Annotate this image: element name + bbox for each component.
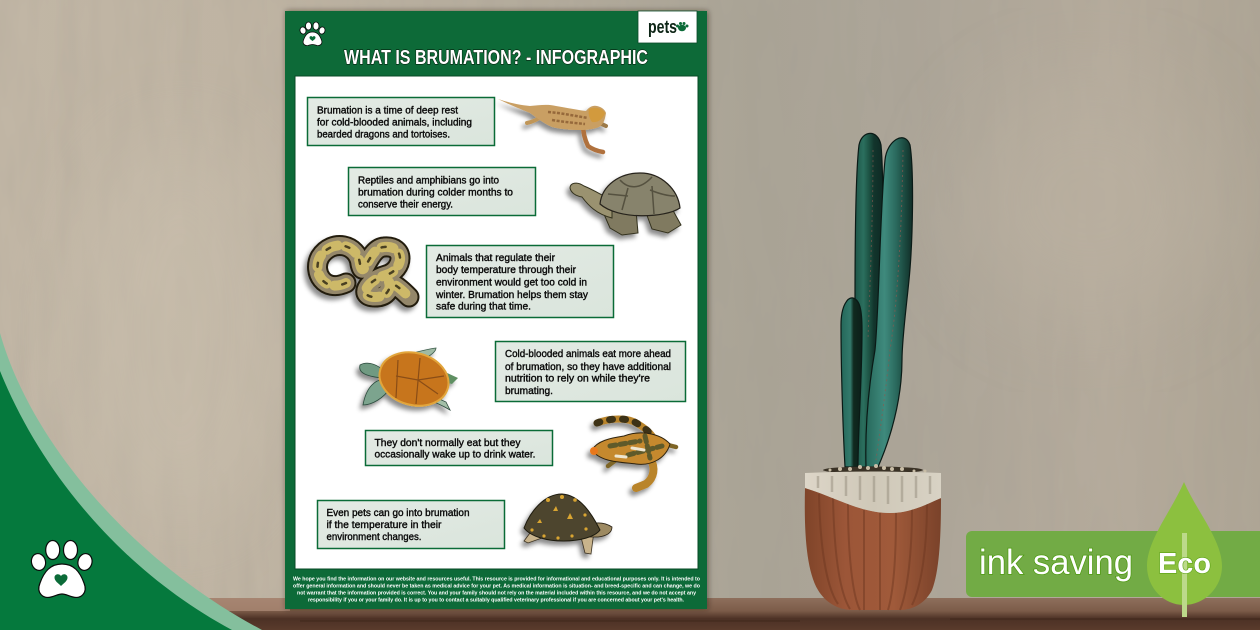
text box 5: occasionally wake up to drink water. bbox=[374, 448, 536, 460]
illustration: giant tortoise bbox=[570, 173, 681, 235]
badge: ink saving: ink saving bbox=[979, 543, 1133, 582]
text box 6: Even pets can go into brumation bbox=[326, 507, 470, 519]
text box 2 bbox=[348, 168, 536, 216]
wooden shelf bbox=[0, 598, 1260, 630]
disclaimer text bbox=[293, 576, 700, 604]
text box 4: Cold-blooded animals eat more ahead bbox=[505, 348, 671, 360]
text box 1: bearded dragons and tortoises. bbox=[317, 128, 450, 140]
pot white rim bbox=[805, 472, 941, 513]
text box 6: environment changes. bbox=[326, 531, 422, 543]
text box 3: Animals that regulate their bbox=[436, 252, 555, 264]
disclaimer text: We hope you find the information on our website and resources useful. This resource is provided for informational and educational purposes only. It is intended to bbox=[293, 576, 700, 582]
text box 2: Reptiles and amphibians go into bbox=[358, 174, 499, 186]
illustration: gecko bbox=[590, 419, 676, 488]
logo: pets bbox=[638, 11, 697, 43]
icon: poster paw bbox=[299, 22, 326, 46]
corner decoration: green curved panel bbox=[0, 333, 262, 630]
text box 3: body temperature through their bbox=[436, 264, 576, 276]
text box 4: of brumation, so they have additional bbox=[505, 361, 671, 373]
icon: large paw with heart bbox=[30, 540, 94, 597]
text box 4: brumating. bbox=[505, 385, 553, 397]
pebbles bbox=[823, 464, 926, 474]
text box 1: Brumation is a time of deep rest bbox=[317, 104, 458, 116]
poster bbox=[285, 11, 707, 609]
disclaimer text: responsibility if you or your family do. It is up to you to contact a suitably qualified veterinary professional if you are concerned about your pet's health. bbox=[308, 598, 685, 604]
illustration: cactus in pot bbox=[805, 133, 941, 610]
text box 5: They don't normally eat but they bbox=[374, 437, 521, 449]
illustration: coiled snake bbox=[318, 245, 409, 297]
text box 1 bbox=[308, 98, 494, 146]
illustration: sea turtle bbox=[360, 345, 458, 413]
text box 1: for cold-blooded animals, including bbox=[317, 116, 472, 128]
poster green background bbox=[285, 11, 707, 609]
text box 4 bbox=[496, 342, 686, 402]
disclaimer text: offer general information and should never be taken as medical advice for your pet. As medical information is situation- and breed-specific and can change, we do bbox=[293, 584, 700, 590]
white content panel bbox=[295, 76, 698, 569]
text box 5 bbox=[366, 430, 552, 466]
text box 2: conserve their energy. bbox=[358, 198, 453, 210]
illustration: small star tortoise bbox=[524, 494, 612, 554]
text box 6 bbox=[318, 500, 504, 548]
pot body bbox=[805, 488, 941, 610]
text box 4: nutrition to rely on while they're bbox=[505, 372, 650, 384]
cactus stems bbox=[841, 133, 913, 467]
text box 3: safe during that time. bbox=[436, 300, 531, 312]
title: WHAT IS BRUMATION? - INFOGRAPHIC bbox=[344, 47, 648, 69]
logo: pets: pets bbox=[648, 17, 677, 37]
text box 3: winter. Brumation helps them stay bbox=[435, 289, 589, 301]
badge: ink saving bbox=[966, 482, 1260, 617]
text box 3 bbox=[426, 246, 614, 318]
icon: eco leaf drop: Eco bbox=[1158, 548, 1211, 580]
icon: eco leaf drop bbox=[1147, 482, 1222, 617]
disclaimer text: not warrant that the information provided is correct. You and your family should not rely on the material included within this resource, and we do not accept any bbox=[297, 590, 696, 596]
text box 2: brumation during colder months to bbox=[358, 186, 513, 198]
text box 3: environment would get too cold in bbox=[436, 276, 587, 288]
text box 6: if the temperature in their bbox=[326, 519, 442, 531]
illustration: bearded dragon bbox=[498, 99, 606, 152]
